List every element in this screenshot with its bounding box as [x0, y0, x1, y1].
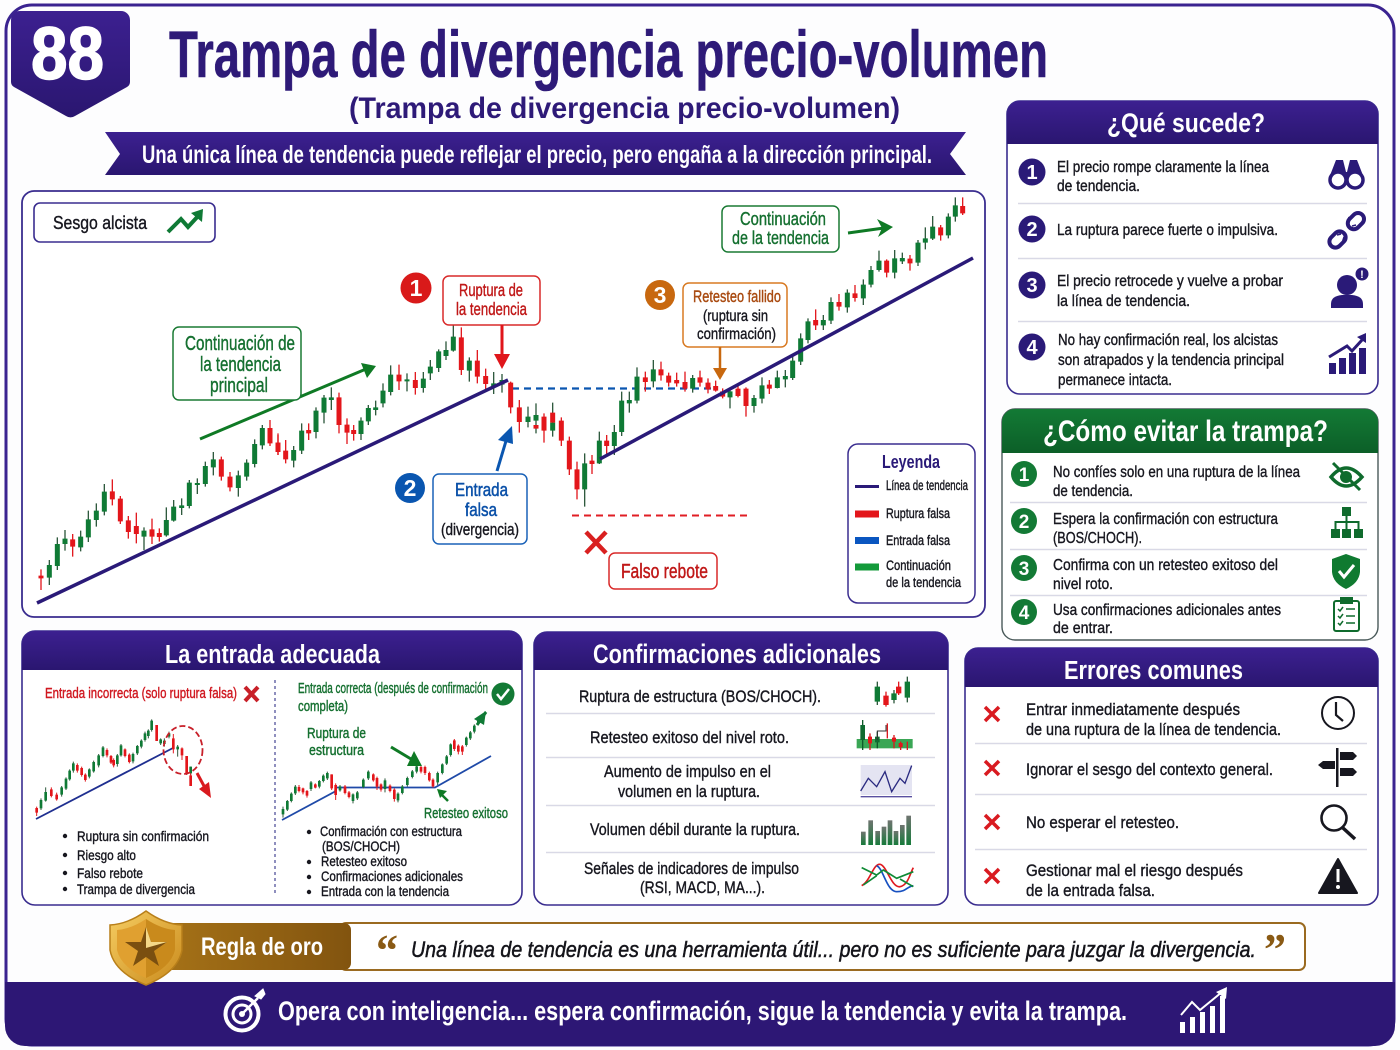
arrow: ruptura — [494, 325, 510, 369]
item 4: son atrapados y la tendencia principal — [1058, 352, 1284, 369]
arrow: continuation — [848, 219, 893, 237]
footer bar — [5, 982, 1395, 1046]
callout: entrada falsa — [433, 474, 527, 544]
item 4: de la entrada falsa. — [1026, 881, 1155, 900]
icon: binoculars — [1329, 160, 1364, 188]
sub-panel: wrong entry heading: Entrada incorrecta (solo ruptura falsa) — [45, 685, 237, 702]
row 2: Retesteo exitoso del nivel roto. — [590, 729, 789, 747]
header — [534, 632, 948, 670]
legend: Continuación — [886, 558, 951, 573]
callout: ruptura de la tendencia: la tendencia — [456, 299, 527, 319]
item 2: 2 — [1026, 219, 1038, 241]
callout: entrada falsa: Entrada — [455, 479, 509, 500]
label: ruptura de estructura — [307, 726, 366, 759]
callout: continuacion de la tendencia: Continuación — [740, 208, 826, 229]
sub-panel: correct entry heading: Entrada correcta (después de confirmación — [298, 681, 488, 697]
row 3 — [604, 763, 771, 801]
callout: retesteo fallido: Retesteo fallido — [693, 288, 781, 306]
ribbon banner: Una única línea de tendencia puede reflejar el precio, pero engaña a la dirección principal. — [142, 141, 932, 169]
item 3: 3 — [1026, 275, 1038, 297]
callout: retesteo fallido: (ruptura sin — [703, 308, 768, 325]
icon: retest zone — [857, 720, 913, 750]
list: correct entry bullets — [307, 824, 463, 899]
item 1: 1 — [1026, 162, 1038, 184]
icon: person alert: ! — [1360, 269, 1364, 281]
list: correct entry bullets: Confirmación con estructura — [320, 824, 462, 839]
panel: que sucede — [1007, 101, 1378, 394]
icon: indicators — [862, 864, 913, 892]
label: regla de oro — [150, 923, 351, 970]
item 3: la línea de tendencia. — [1057, 293, 1190, 310]
callout: falso rebote: Falso rebote — [621, 561, 708, 583]
item 1: 1 — [1019, 465, 1030, 486]
sub-panel: correct entry heading: completa) — [298, 699, 348, 715]
arrow: main trend — [200, 363, 376, 439]
icon: candles — [877, 677, 907, 707]
item 3: 3 — [1019, 559, 1029, 580]
row 5 — [584, 860, 799, 897]
item 1 — [1011, 461, 1300, 500]
legend — [848, 444, 975, 603]
marker 1: 1 — [410, 275, 423, 301]
legend: de la tendencia — [886, 575, 961, 590]
list: correct entry bullets: Retesteo exitoso — [321, 854, 407, 869]
quote box: ” — [1264, 925, 1286, 974]
dashed level lines — [512, 388, 748, 516]
label: retesteo exitoso: Retesteo exitoso — [424, 806, 508, 822]
banner: regla de oro — [110, 911, 1305, 985]
quote box — [340, 923, 1305, 975]
icon: warning — [1319, 859, 1357, 893]
item 3: Confirma con un retesteo exitoso del — [1053, 557, 1278, 574]
item 1 — [985, 700, 1281, 739]
callout: ruptura de la tendencia: Ruptura de — [459, 280, 523, 300]
header: Confirmaciones adicionales — [593, 639, 881, 669]
item 4 — [985, 861, 1243, 900]
callout: continuacion de la tendencia: de la tendencia — [732, 227, 830, 248]
icon: momentum line — [861, 765, 912, 797]
marker 3 — [645, 280, 675, 310]
legend: Ruptura falsa — [886, 506, 950, 521]
item 3 — [1011, 555, 1278, 593]
row 5: (RSI, MACD, MA...). — [640, 879, 765, 897]
item 1: Entrar inmediatamente después — [1026, 700, 1240, 719]
item 4 — [1018, 332, 1284, 389]
label: sesgo alcista: Sesgo alcista — [53, 212, 148, 233]
icon: rising bars — [1180, 987, 1227, 1033]
panel: errores comunes — [965, 648, 1378, 905]
icon: growth chart — [1329, 333, 1366, 374]
header: La entrada adecuada — [165, 641, 381, 669]
marker 2: 2 — [404, 475, 416, 501]
item 1: de tendencia. — [1053, 483, 1133, 500]
panel: como evitar la trampa — [1002, 409, 1378, 640]
callout: continuacion de la tendencia — [722, 206, 839, 252]
row 4: Volumen débil durante la ruptura. — [590, 821, 800, 839]
item 4: permanece intacta. — [1058, 372, 1172, 389]
item 4 — [1011, 599, 1281, 637]
arrow: entrada falsa — [497, 426, 513, 471]
item 4: No hay confirmación real, los alcistas — [1058, 332, 1278, 349]
label: ruptura de estructura: estructura — [309, 743, 365, 759]
item 3: El precio retrocede y vuelve a probar — [1057, 273, 1284, 290]
item 2: 2 — [1019, 512, 1029, 533]
legend: Línea de tendencia — [886, 478, 968, 493]
item 3 — [1018, 272, 1284, 310]
item 2 — [1018, 216, 1278, 242]
item 2: (BOS/CHOCH). — [1053, 530, 1142, 547]
list: correct entry bullets: Entrada con la tendencia — [321, 884, 449, 899]
icon: target — [226, 989, 265, 1030]
icon: shield check — [1332, 554, 1360, 589]
icon: gold shield star — [110, 911, 182, 985]
arrow: retest — [437, 789, 448, 801]
arrow: structure break — [391, 747, 422, 766]
quote box: “ — [376, 926, 398, 975]
item 4: Gestionar mal el riesgo después — [1026, 861, 1243, 880]
footer message: Opera con inteligencia... espera confirmación, sigue la tendencia y evita la trampa. — [278, 996, 1127, 1026]
header — [1002, 409, 1378, 453]
icon: clock — [1322, 697, 1354, 729]
list: correct entry bullets: (BOS/CHOCH) — [322, 839, 400, 854]
icon: crossed eye — [1331, 463, 1362, 490]
item 3: No esperar el retesteo. — [1026, 813, 1179, 832]
trendlines — [37, 258, 973, 603]
arrow: retesteo — [713, 347, 727, 380]
header: Errores comunes — [1064, 657, 1243, 685]
label: sesgo alcista — [34, 203, 215, 242]
icon: person alert — [1331, 268, 1368, 308]
item 2: La ruptura parece fuerte o impulsiva. — [1057, 222, 1278, 239]
title: Trampa de divergencia precio-volumen — [169, 17, 1048, 91]
item 1: No confíes solo en una ruptura de la línea — [1053, 464, 1300, 481]
legend: Leyenda — [882, 451, 941, 472]
list: wrong entry bullets: Trampa de divergencia — [77, 881, 195, 897]
icon: signpost — [1318, 748, 1357, 787]
list: wrong entry bullets — [63, 828, 209, 897]
callout: entrada falsa: falsa — [465, 499, 498, 520]
row 3: volumen en la ruptura. — [618, 783, 760, 801]
icon: hierarchy — [1331, 507, 1363, 538]
item 2 — [1011, 508, 1278, 547]
badge: number 88: 88 — [31, 12, 104, 95]
callout: falso rebote — [609, 553, 717, 589]
callout: retesteo fallido — [683, 283, 787, 347]
panel: confirmaciones adicionales — [534, 632, 948, 905]
header: ¿Qué sucede? — [1107, 108, 1265, 138]
icon: broken chain — [1327, 210, 1367, 250]
ribbon banner — [105, 132, 966, 175]
list: correct entry bullets: Confirmaciones adicionales — [321, 869, 463, 884]
item 1 — [1018, 158, 1269, 195]
label: regla de oro: Regla de oro — [201, 933, 323, 961]
list: wrong entry bullets: Ruptura sin confirmación — [77, 828, 209, 844]
header — [1007, 101, 1378, 144]
item 1: de tendencia. — [1057, 178, 1140, 195]
header: ¿Cómo evitar la trampa? — [1043, 415, 1328, 448]
item 3: nivel roto. — [1053, 576, 1113, 593]
item 2: Espera la confirmación con estructura — [1053, 511, 1278, 528]
callout: continuacion de la tendencia principal — [173, 327, 301, 400]
callout: continuacion de la tendencia principal: Continuación de — [185, 333, 295, 355]
row 5: Señales de indicadores de impulso — [584, 860, 799, 878]
header — [965, 648, 1378, 687]
callout: ruptura de la tendencia — [443, 276, 540, 325]
callout: continuacion de la tendencia principal: principal — [210, 375, 268, 397]
sub-panel: correct entry heading — [298, 681, 514, 715]
item 4: 4 — [1019, 603, 1030, 624]
list: wrong entry bullets: Falso rebote — [77, 865, 143, 881]
panel: main chart — [22, 191, 985, 617]
label: ruptura de estructura: Ruptura de — [307, 726, 366, 742]
icon: red x — [586, 532, 606, 553]
row 3: Aumento de impulso en el — [604, 763, 771, 781]
subtitle: (Trampa de divergencia precio-volumen) — [349, 92, 900, 125]
candlestick chart — [41, 197, 963, 590]
marker 2 — [395, 473, 425, 503]
icon: checklist — [1334, 598, 1359, 631]
chart: wrong entry — [36, 719, 211, 819]
item 2: Ignorar el sesgo del contexto general. — [1026, 760, 1273, 779]
item 4: 4 — [1026, 337, 1038, 359]
row 1: Ruptura de estructura (BOS/CHOCH). — [579, 688, 821, 706]
callout: entrada falsa: (divergencia) — [441, 521, 519, 539]
marker 3: 3 — [654, 282, 666, 308]
item 1: de una ruptura de la línea de tendencia. — [1026, 720, 1281, 739]
chart: correct entry — [282, 711, 491, 820]
badge: number 88 — [11, 11, 130, 117]
panel: la entrada adecuada — [22, 631, 522, 905]
icon: volume bars — [861, 816, 911, 845]
item 4: de entrar. — [1053, 620, 1113, 637]
icon: magnifier — [1322, 806, 1355, 839]
quote box: Una línea de tendencia es una herramienta útil... pero no es suficiente para juzgar la divergencia. — [411, 937, 1256, 962]
callout: continuacion de la tendencia principal: la tendencia — [200, 354, 282, 376]
callout: retesteo fallido: confirmación) — [697, 326, 776, 343]
header — [22, 631, 522, 670]
marker 1 — [400, 272, 432, 304]
list: wrong entry bullets: Riesgo alto — [77, 847, 136, 863]
legend: Entrada falsa — [886, 533, 950, 548]
item 4: Usa confirmaciones adicionales antes — [1053, 602, 1281, 619]
item 1: El precio rompe claramente la línea — [1057, 159, 1269, 176]
